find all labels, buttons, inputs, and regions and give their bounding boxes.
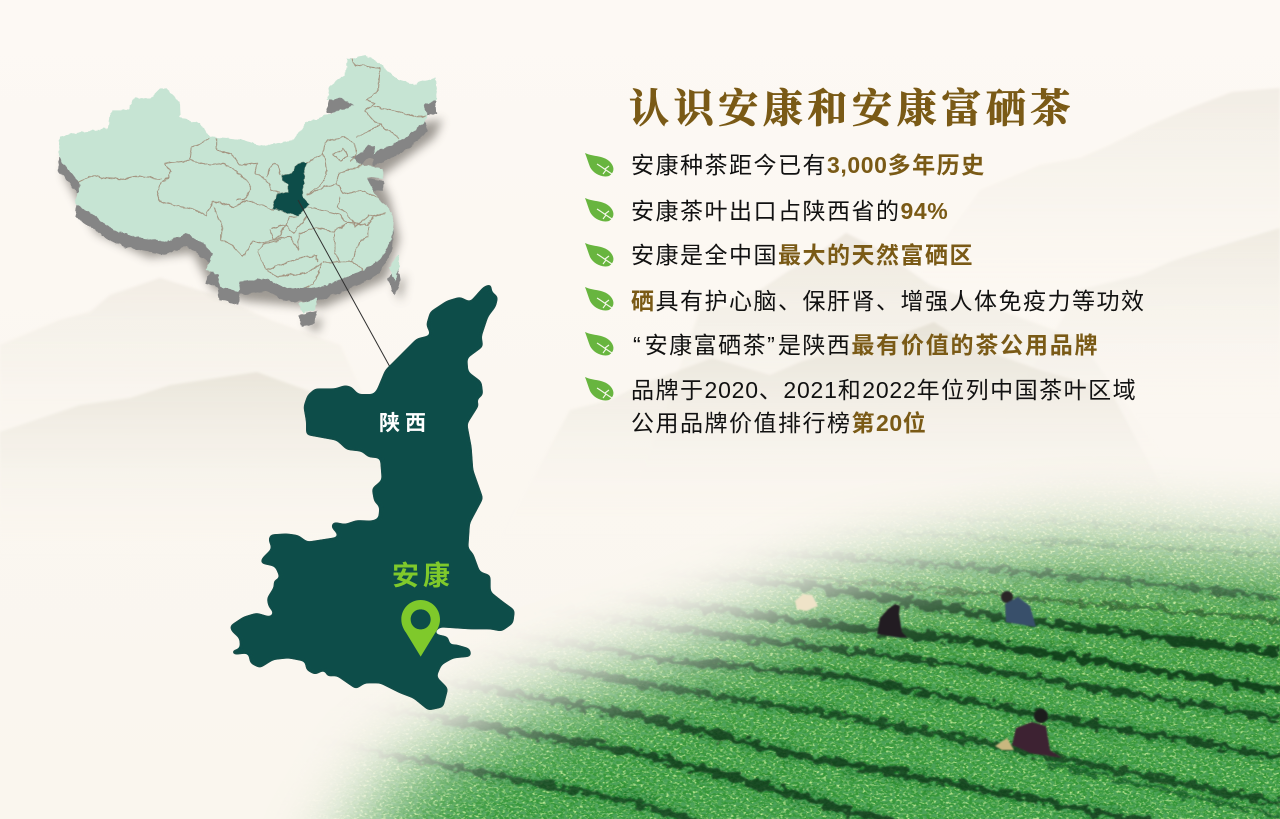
fact 4: 硒具有护心脑、保肝肾、增强人体免疫力等功效 — [631, 288, 1146, 314]
background: ink mountains — [0, 88, 1280, 560]
Shaanxi shape — [229, 283, 515, 711]
icon: leaf 1 — [585, 153, 613, 176]
map body — [58, 55, 437, 326]
title: 认识安康和安康富硒茶 — [629, 86, 1075, 131]
icon: leaf 4 — [585, 287, 613, 310]
icon: leaf 6 — [585, 377, 613, 400]
map drop shadow — [64, 119, 443, 333]
fact 2: 安康茶叶出口占陕西省的94% — [631, 198, 948, 224]
map: Shaanxi highlighted — [272, 162, 308, 216]
map: Hainan — [298, 298, 317, 313]
fact 5: “安康富硒茶”是陕西最有价值的茶公用品牌 — [633, 332, 1099, 358]
tea field photo — [304, 488, 1280, 819]
fact 6: 公用品牌价值排行榜第20位 — [631, 410, 927, 436]
map: province borders — [78, 58, 427, 288]
icon: leaf 5 — [585, 332, 613, 355]
map of China — [58, 55, 443, 333]
fact 6: 品牌于2020、2021和2022年位列中国茶叶区域 — [631, 377, 1137, 403]
icon: leaf 3 — [585, 243, 613, 266]
tea pickers — [795, 591, 1062, 758]
basket — [795, 594, 818, 611]
fact 6 — [631, 377, 1137, 436]
map of Shaanxi — [229, 283, 515, 711]
picker: man in blue jacket — [1001, 591, 1036, 627]
connector line — [298, 200, 390, 367]
map land — [58, 55, 437, 292]
fact 3: 安康是全中国最大的天然富硒区 — [631, 242, 974, 268]
map extrusion — [58, 68, 436, 326]
picker: woman in black — [877, 604, 908, 638]
label: Ankang: 安康 — [392, 561, 454, 591]
icon: leaf 2 — [585, 198, 613, 221]
bullet leaves — [585, 153, 613, 400]
fact 1: 安康种茶距今已有3,000多年历史 — [631, 152, 986, 178]
picker: man in maroon shirt — [995, 709, 1062, 758]
icon: location pin — [401, 600, 440, 657]
map: Taiwan — [388, 254, 400, 282]
label: Shaanxi: 陕西 — [379, 412, 431, 435]
